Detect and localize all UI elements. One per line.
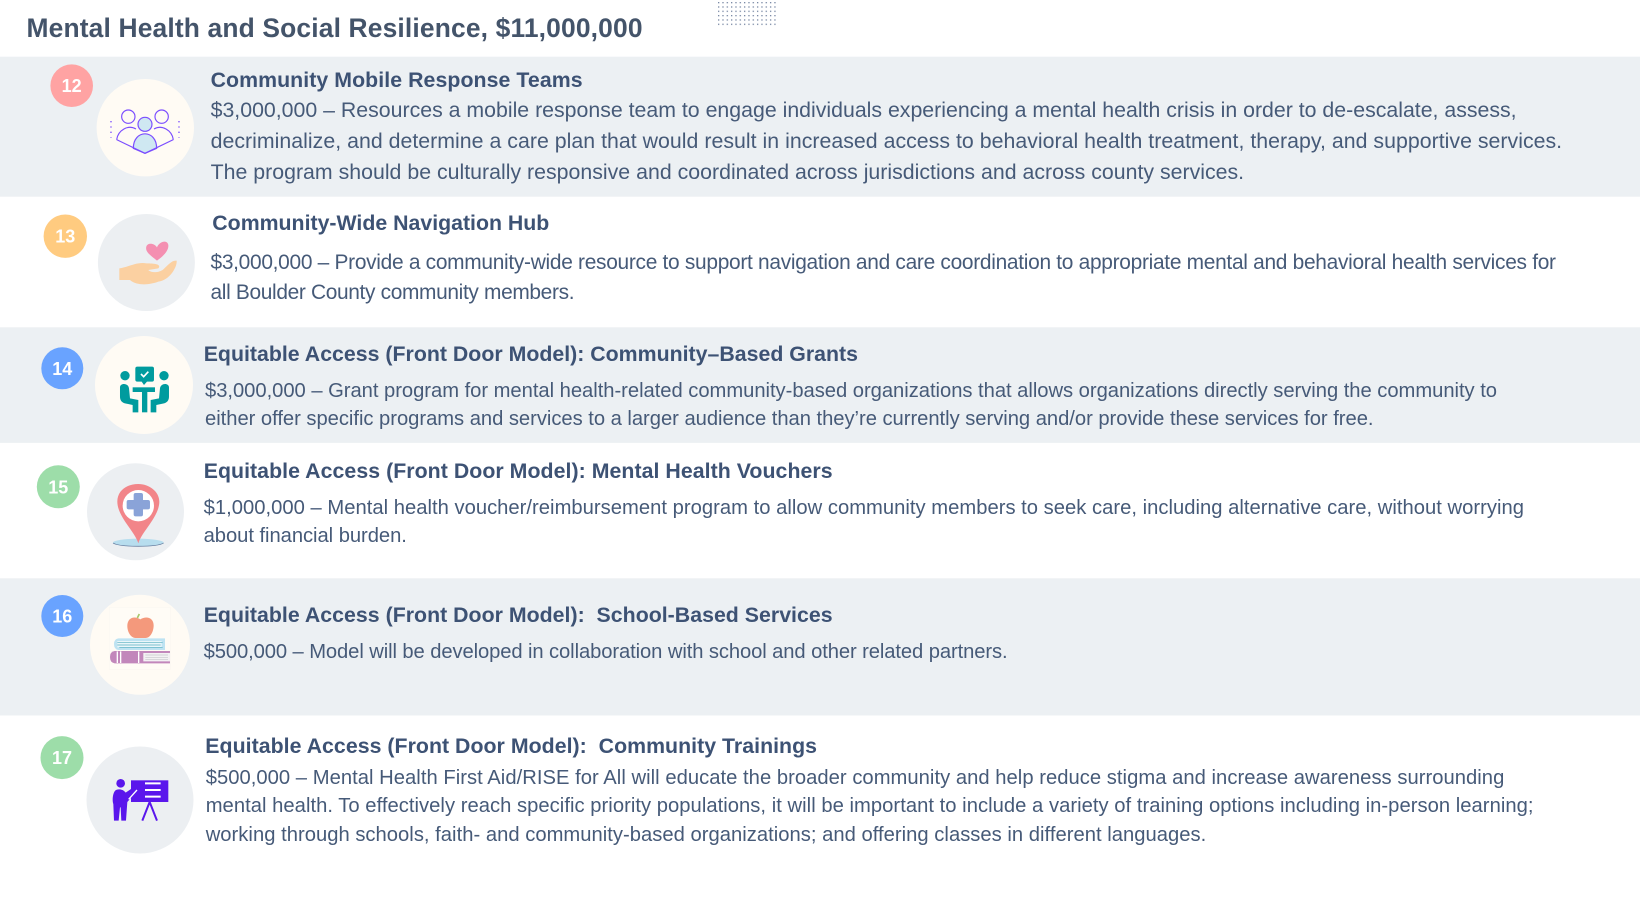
- description: [204, 497, 1524, 547]
- description: decriminalize, and determine a care plan that would result in increased access to behavioral health treatment, therapy, and supportive services.: [211, 129, 1562, 153]
- icon: apple on books: [90, 595, 190, 695]
- description: $3,000,000 – Resources a mobile response team to engage individuals experiencing a mental health crisis in order to de-escalate, assess,: [211, 98, 1517, 122]
- heading: Equitable Access (Front Door Model): Mental Health Vouchers: [204, 459, 833, 483]
- number badge 13: 13: [55, 227, 75, 247]
- background bands: [0, 57, 1640, 715]
- description: $1,000,000 – Mental health voucher/reimbursement program to allow community members to seek care, including alternative care, without worrying: [204, 497, 1524, 519]
- panel: item 14: [41, 336, 1497, 434]
- description: all Boulder County community members.: [210, 281, 574, 304]
- icon: hand with heart: [98, 214, 195, 311]
- description: mental health. To effectively reach specific priority populations, it will be important to include a variety of training options including in-person learning;: [206, 795, 1534, 817]
- description: $3,000,000 – Grant program for mental health-related community-based organizations that allows organizations directly serving the community to: [205, 380, 1497, 402]
- icon: trainer at board: [86, 746, 194, 854]
- description: [210, 251, 1556, 304]
- number badge 12: 12: [62, 76, 82, 96]
- heading: Equitable Access (Front Door Model): Community–Based Grants: [204, 342, 858, 366]
- heading: Community Mobile Response Teams: [211, 68, 583, 92]
- number badge 16: [41, 595, 83, 637]
- description: about financial burden.: [204, 525, 407, 547]
- icon: medical location pin: [87, 463, 184, 560]
- number badge 14: [41, 347, 83, 389]
- description: [205, 380, 1497, 430]
- number badge 14: 14: [52, 359, 72, 379]
- panel: item 16: [41, 595, 1008, 695]
- panel: item 15: [37, 459, 1524, 560]
- panel: item 13: [44, 211, 1556, 311]
- title: Mental Health and Social Resilience, $11,000,000: [26, 13, 642, 43]
- dot pattern: [718, 2, 777, 26]
- description: $3,000,000 – Provide a community-wide resource to support navigation and care coordination to appropriate mental and behavioral health services for: [210, 251, 1556, 274]
- heading: Community-Wide Navigation Hub: [212, 211, 549, 235]
- description: either offer specific programs and services to a larger audience than they’re currently serving and/or provide these services for free.: [205, 408, 1374, 430]
- number badge 15: [37, 465, 80, 508]
- panel: item 12: [50, 64, 1562, 184]
- description: The program should be culturally responsive and coordinated across jurisdictions and across county services.: [211, 160, 1244, 184]
- number badge 17: 17: [52, 748, 72, 768]
- description: working through schools, faith- and community-based organizations; and offering classes in different languages.: [205, 824, 1206, 846]
- icon: community group: [97, 79, 194, 176]
- heading: Equitable Access (Front Door Model): Community Trainings: [205, 734, 817, 758]
- number badge 13: [44, 214, 87, 258]
- number badge 16: 16: [52, 606, 72, 626]
- number badge 17: [40, 736, 84, 779]
- icon: people meeting: [95, 336, 193, 434]
- number badge 12: [50, 64, 93, 107]
- panel: item 17: [40, 734, 1534, 854]
- description: $500,000 – Mental Health First Aid/RISE for All will educate the broader community and help reduce stigma and increase awareness surrounding: [206, 767, 1504, 789]
- description: [205, 767, 1534, 846]
- description: [211, 98, 1562, 184]
- heading: Equitable Access (Front Door Model): School-Based Services: [204, 603, 833, 627]
- number badge 15: 15: [48, 477, 68, 497]
- description: $500,000 – Model will be developed in collaboration with school and other related partners.: [204, 641, 1008, 663]
